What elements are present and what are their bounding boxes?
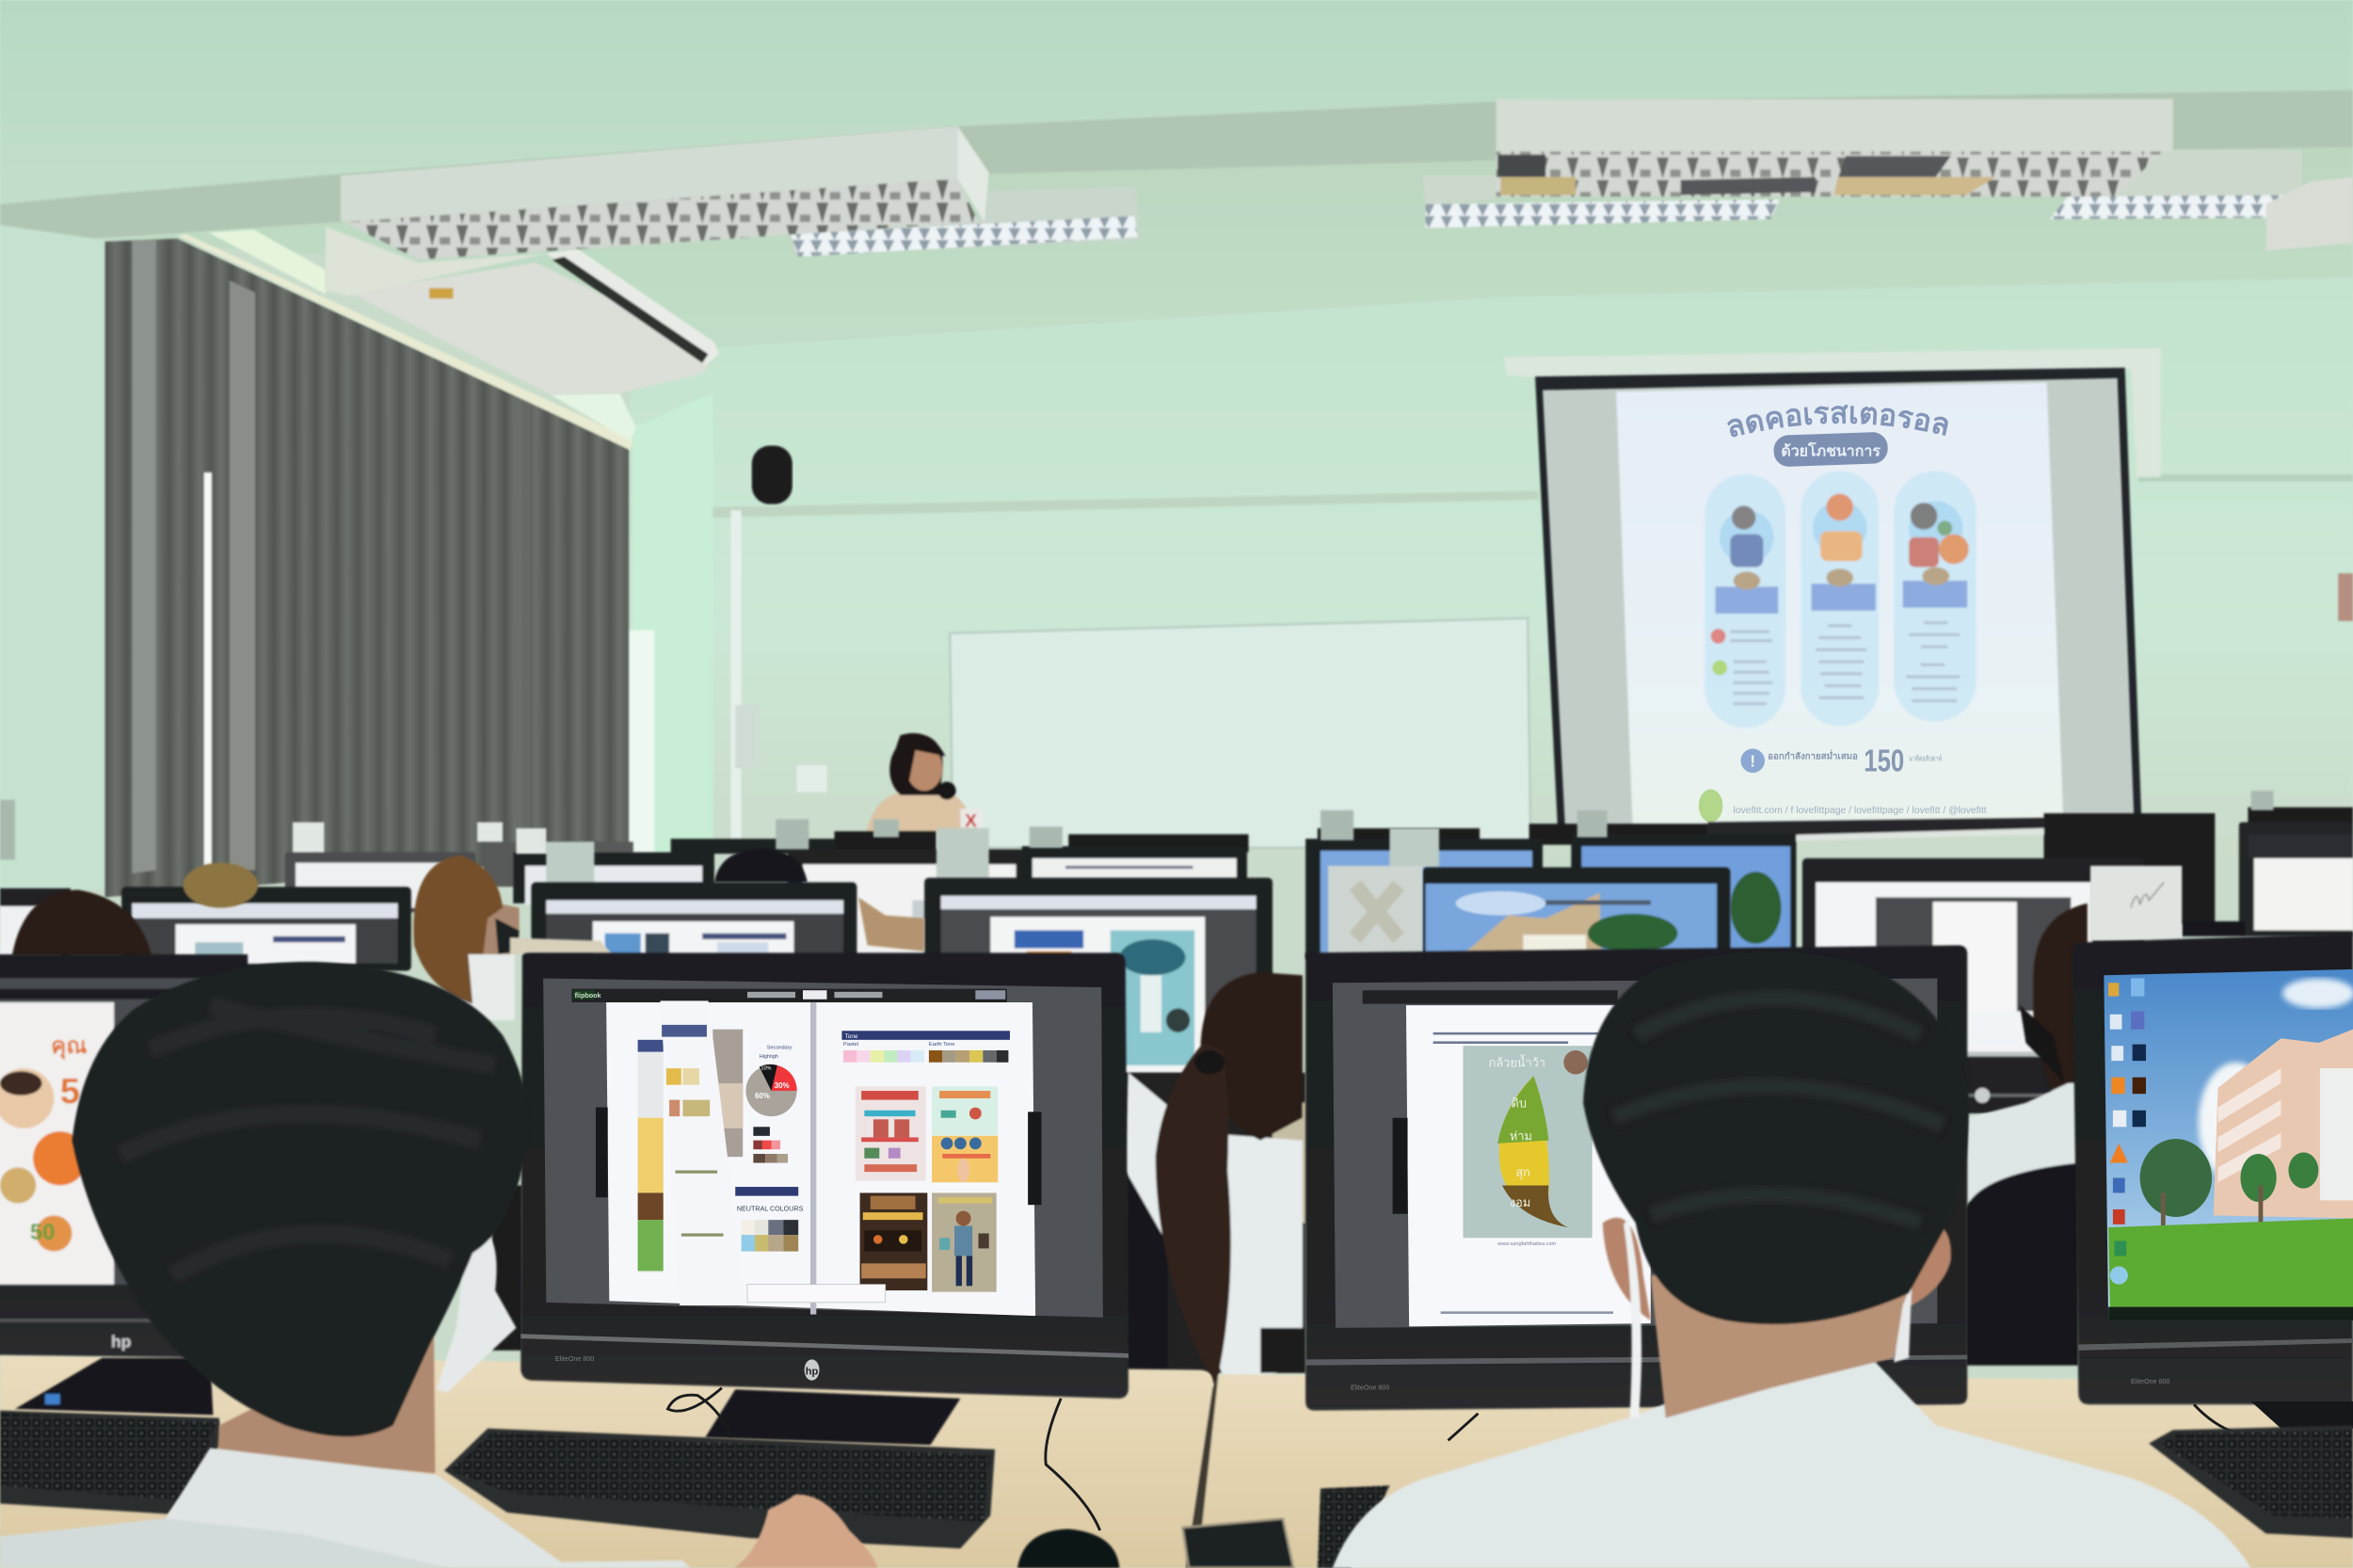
slide title: ลดคอเรสเตอรอล [1727,405,1948,437]
pie chart: highlight secondary dominant: 30% [775,1081,790,1090]
thumbnail infographics [856,1086,998,1292]
right page tone swatches: Tone [845,1033,858,1040]
slide exercise note [1740,744,1942,778]
slide footer links: lovefitt.com / f lovefittpage / lovefittpage / lovefitt / @lovefitt [1734,806,1987,816]
front monitor: left: 50 [30,1220,55,1245]
monitor: middle left [121,887,411,970]
slide exercise note: 150 [1864,744,1904,778]
front monitor: centre with book [520,952,1128,1445]
banana infographic: ดิบ [1512,1096,1527,1111]
monitor: middle far left [0,888,71,960]
chair [1966,1163,2078,1366]
monitor: middle centre-left [531,882,856,960]
right student hair [1583,952,1969,1324]
student: woman with mask [413,856,613,1020]
screen slide content [1698,405,1987,823]
slide subtitle pill: ด้วยโภชนาการ [1781,441,1881,460]
viewer toolbar: flipbook [575,992,600,1000]
popup box [747,1285,886,1303]
banana infographic: สุก [1515,1165,1530,1180]
keyboard: bottom middle [1318,1485,1389,1568]
back monitor: second [483,841,714,904]
desktop wallpaper [2104,969,2353,1320]
phone [1182,1518,1293,1568]
left student shirt [0,1448,690,1568]
right student mask strap [1624,1219,1641,1418]
left student collar shadow [0,1518,450,1568]
monitor: middle desktop [1422,867,1730,957]
left student mask [437,1229,516,1392]
right page tone swatches [841,1031,1010,1063]
projection screen [1504,348,2161,825]
back view black monitor [2044,813,2215,924]
student: arm [858,897,924,952]
back monitor: blue desktop [1305,839,1543,959]
back monitor: centre [788,849,1028,954]
slide exercise note: ออกกำลังกายสม่ำเสมอ [1768,749,1858,762]
banana infographic [1464,1046,1593,1238]
front monitor: left: hp [111,1333,131,1352]
student: ponytail girl [1126,972,1303,1388]
curtain [105,230,636,897]
slide exercise note: ! [1750,752,1755,771]
monitor stand [705,1389,960,1445]
colour swatches [753,1127,788,1163]
source caption: www.sangfahthaitea.com [1497,1241,1557,1247]
monitor chin and logo: EliteOne 800 [555,1355,594,1363]
wall speaker [752,445,792,504]
student: back-row dark hair [714,849,808,882]
keyboard: right [2149,1426,2353,1538]
paper note with X [1328,866,1422,954]
pie chart: highlight secondary dominant: 10% [760,1066,772,1072]
rear light far right [2050,150,2302,219]
back monitor: left [285,853,475,912]
page intro text [1433,1032,1598,1044]
keyboard: centre [444,1429,995,1548]
projector [2266,177,2353,250]
mid-row students [12,849,924,1020]
back monitor: centre right [1022,846,1247,891]
desktop icons [2108,978,2146,1285]
right student neck [1651,1275,1913,1418]
slide footer links [1699,790,1987,823]
air conditioner [326,227,719,394]
rear light right [1422,176,1780,228]
front monitor: left [0,954,255,1415]
slide subtitle pill [1773,432,1888,467]
keyboard: left [0,1411,222,1514]
side nav tabs [596,1108,1042,1205]
neutral colours block [735,1187,804,1252]
folded page strip [661,1000,745,1305]
monitor: far right rear [2239,823,2353,936]
right page tone swatches: Earth Tone [929,1042,954,1048]
whiteboard [950,618,1530,848]
monitor: middle right [1802,858,2146,1113]
left page coconut infographic [638,1040,664,1272]
paper cards on monitors [293,791,2273,884]
front monitor: far right with desktop: EliteOne 800 [2131,1378,2169,1385]
neutral colours block: NEUTRAL COLOURS [737,1206,804,1213]
dark chair beside ponytail [1128,1171,1167,1373]
back monitor: blue desktop with tree [1571,834,1796,954]
student: far-left head [12,889,152,956]
banana infographic: กล้วยน้ำว้า [1489,1054,1545,1070]
keyboards [0,1411,2353,1568]
front monitor: left: คุณ [51,1033,87,1060]
right page tone swatches: Pastel [843,1042,858,1048]
viewer toolbar [571,989,1007,1002]
front monitor: right with banana page [1305,945,1967,1411]
front student: right [1333,952,2251,1568]
paper note with signature [2090,866,2182,941]
monitor: middle centre [924,878,1273,1103]
banana page [1406,1005,1651,1326]
pie chart: highlight secondary dominant: Secondary [767,1045,792,1050]
front monitor: right with banana page: EliteOne 800 [1351,1384,1389,1391]
desk and dark space behind front row [492,904,2088,1388]
left student hair [72,962,528,1437]
monitor chin and logo [520,1334,1128,1381]
front light right [1497,99,2173,197]
back row of monitors [285,808,2353,959]
slide step columns [1705,472,1977,728]
right student ears [1603,1218,1651,1320]
left student neck [217,1318,435,1474]
middle row of monitors [0,858,2146,1113]
front student: left [0,962,690,1568]
pie chart: highlight secondary dominant: Highligh [760,1054,778,1060]
student: person on right with mask [1967,904,2088,1200]
student: small blond head back row [184,863,258,908]
rear light left [788,186,1141,257]
monitor chin and logo: hp [806,1366,819,1377]
presenter: X [965,811,977,831]
front light left [341,126,989,260]
ceiling light fixtures [341,99,2353,260]
presenter [866,733,983,834]
banana infographic: งอม [1510,1195,1530,1209]
mouse [1017,1529,1119,1568]
pie chart: highlight secondary dominant: 60% [755,1092,770,1100]
open book pages [606,1002,1035,1316]
pie chart: highlight secondary dominant [745,1045,797,1116]
cables [668,1388,2236,1530]
right student shirt [1333,1363,2251,1568]
hand on keyboard [734,1495,878,1568]
front monitor: left: 5 [60,1071,80,1112]
slide exercise note: นาทีต่อสัปดาห์ [1909,753,1942,762]
desks [0,1355,2353,1568]
banana infographic: ห่าม [1510,1129,1532,1144]
front monitor: far right with desktop [2073,934,2353,1429]
